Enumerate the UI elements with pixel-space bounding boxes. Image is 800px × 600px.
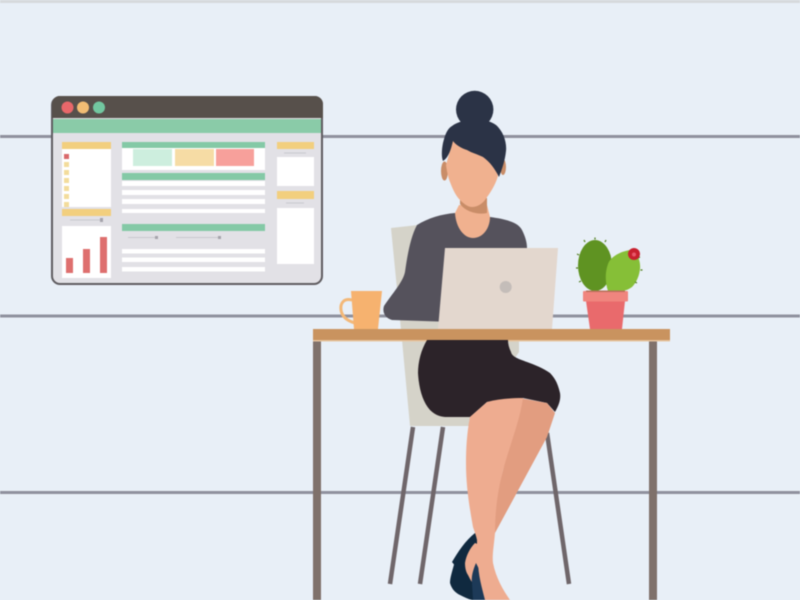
coffee mug xyxy=(341,291,382,329)
sweater and arm xyxy=(383,213,527,322)
hair bun xyxy=(456,91,493,128)
chair xyxy=(390,225,569,584)
flower xyxy=(628,248,640,260)
woman xyxy=(383,91,560,600)
middle column colour tiles xyxy=(122,142,265,170)
laptop logo xyxy=(500,281,512,293)
middle column text rows xyxy=(122,173,265,272)
right column cards xyxy=(277,142,314,264)
cactus plant in pot xyxy=(576,238,642,329)
back shoe xyxy=(450,533,490,600)
laptop xyxy=(438,248,558,329)
desk xyxy=(313,329,670,600)
cactus stems xyxy=(576,238,642,291)
ears xyxy=(441,162,448,180)
front shoe xyxy=(472,563,490,600)
leg xyxy=(466,398,523,600)
left column list xyxy=(62,142,111,222)
neck shadow xyxy=(460,198,487,214)
hair xyxy=(442,119,506,177)
face xyxy=(446,140,498,207)
leg shadow xyxy=(490,398,555,533)
back foot xyxy=(465,543,482,583)
bar chart xyxy=(62,226,111,278)
panel: browser window dashboard xyxy=(52,96,323,284)
neckline xyxy=(455,205,490,238)
skirt xyxy=(418,340,560,417)
pot xyxy=(583,290,628,329)
